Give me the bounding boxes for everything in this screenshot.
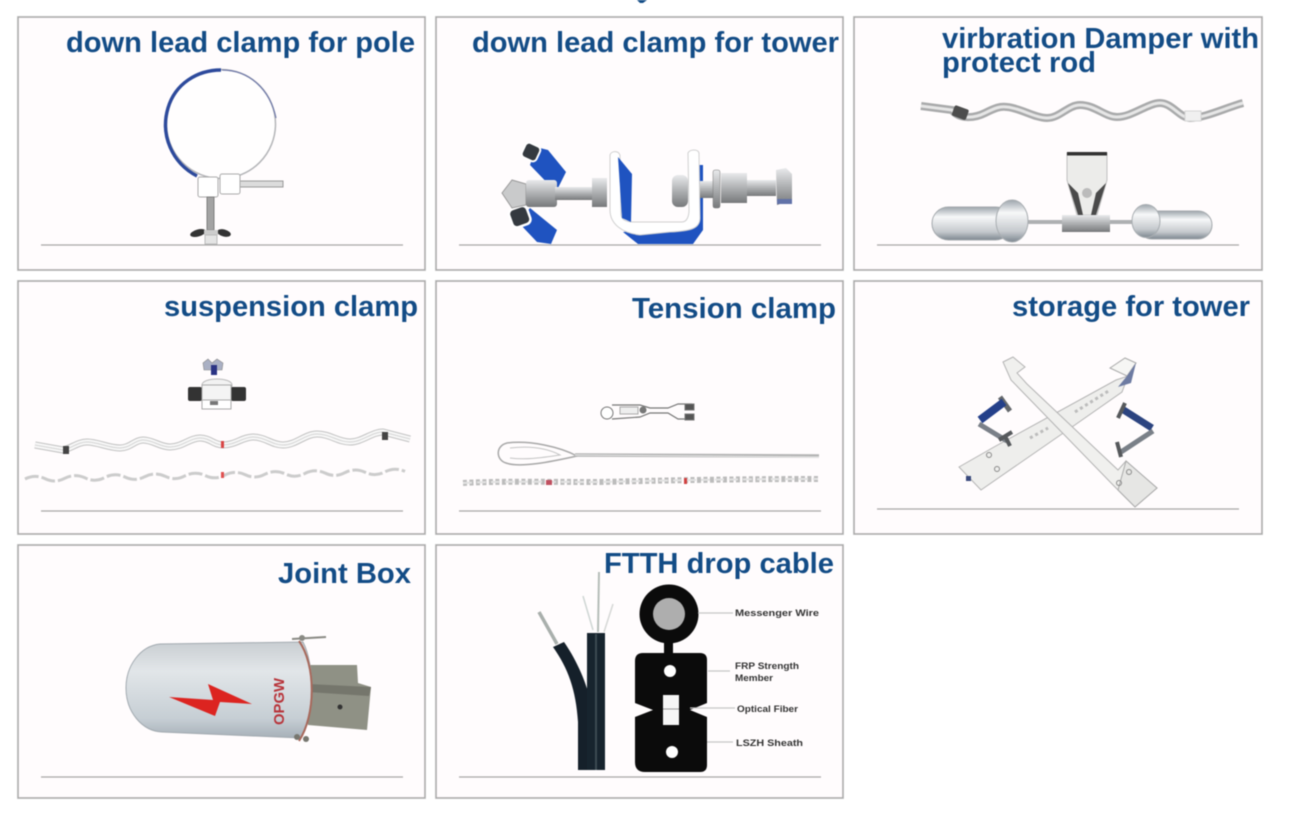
icon: tension fitting [601,404,694,420]
heading: virbration Damper with protect rod [942,23,1259,79]
heading: down lead clamp for tower: down lead clamp for tower [472,27,839,59]
panel: suspension clamp [18,281,425,534]
panel: down lead clamp for pole [18,17,425,270]
panel: down lead clamp for tower [436,17,843,270]
icon: joint box [126,635,371,742]
icon: drop cable photo [539,572,613,770]
heading: FTTH drop cable: FTTH drop cable [604,548,834,580]
labels: cable parts [690,608,819,748]
top cropped mark [637,0,647,3]
heading: Joint Box: Joint Box [278,558,411,590]
heading: storage for tower: storage for tower [1012,291,1250,323]
icon: tower clamp [502,141,792,244]
icon: armor rods [25,432,410,481]
heading: Tension clamp: Tension clamp [632,293,836,325]
labels: cable parts: FRP Strength [735,661,799,671]
icon: crossed storage brackets [959,357,1157,507]
heading: suspension clamp: suspension clamp [164,291,418,323]
panel: FTTH drop cable [436,545,843,798]
panel: storage for tower [854,281,1262,534]
heading: virbration Damper with protect rod: protect rod [942,47,1096,79]
icon: protect rod [921,103,1243,121]
labels: cable parts: Optical Fiber [737,704,799,714]
panel: Tension clamp [436,281,843,534]
heading: down lead clamp for pole: down lead clamp for pole [66,27,415,59]
icon: dead-end preform [498,442,819,465]
panel: Joint Box [18,545,425,798]
heading: virbration Damper with protect rod: virbration Damper with [942,23,1259,55]
icon: pole clamp [166,70,283,244]
icon: twisted rod [463,478,818,485]
OPGW label: OPGW [271,677,288,725]
icon: vibration damper [932,152,1212,242]
labels: cable parts: Member [735,673,774,683]
panel: virbration damper with protect rod [854,17,1262,270]
labels: cable parts: Messenger Wire [735,608,819,618]
labels: cable parts: LSZH Sheath [736,738,803,748]
diagram: cable cross section [635,584,707,772]
icon: suspension clamp fitting [188,359,246,409]
